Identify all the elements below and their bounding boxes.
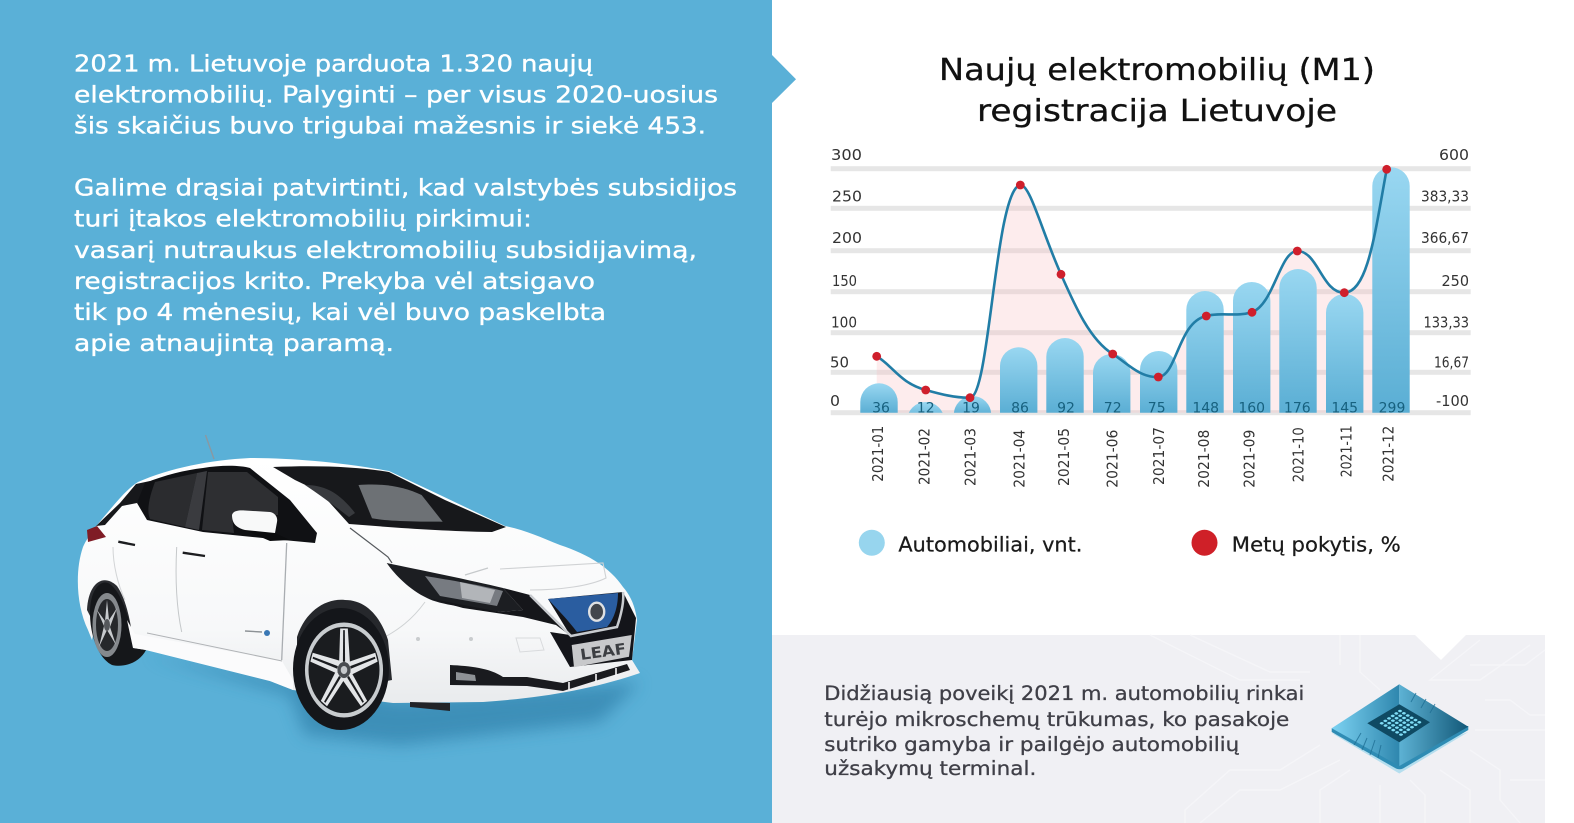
car shadow: [146, 655, 640, 745]
text block: subsidies effect: registracijos krito. Prekyba vėl atsigavo: [74, 269, 595, 295]
left axis labels: 300: [831, 146, 862, 164]
right axis labels: 250: [1442, 272, 1469, 290]
black strip to grille: [427, 588, 572, 637]
bars: cars per month: [860, 167, 1410, 421]
right axis labels: 16,67: [1434, 354, 1469, 372]
right axis labels: 383,33: [1421, 188, 1469, 206]
month axis labels: [869, 425, 1398, 488]
text block: chip shortage note: turėjo mikroschemų trūkumas, ko pasakoje: [824, 708, 1289, 731]
month axis labels: 2021-03: [962, 428, 980, 486]
month axis labels: 2021-01: [869, 426, 887, 482]
Nissan badge: [589, 603, 604, 621]
under-bumper: [410, 702, 450, 711]
front side window: [202, 472, 278, 533]
bar value labels: 160: [1238, 400, 1265, 416]
bar value labels: 176: [1284, 400, 1311, 416]
front seat: [305, 485, 355, 517]
legend: [859, 530, 1401, 557]
heading: chart title: registracija Lietuvoje: [977, 94, 1337, 129]
legend item: yearly change: [1192, 530, 1401, 557]
rear wheel: [87, 580, 146, 666]
month axis labels: 2021-08: [1195, 430, 1213, 488]
right axis labels: 133,33: [1424, 314, 1469, 332]
legend item: cars: Automobiliai, vnt.: [898, 533, 1082, 557]
arrow pointing at chart: [772, 55, 796, 103]
bar value labels: 148: [1192, 400, 1219, 416]
line data points: [872, 165, 1391, 402]
number plate LEAF: [572, 635, 632, 667]
text block: chip shortage note: užsakymų terminal.: [824, 757, 1036, 780]
door seams and handles: [113, 528, 606, 661]
bar value labels: 12: [917, 400, 935, 416]
number plate LEAF: LEAF: [579, 640, 627, 664]
rear black trim and tail light: [87, 481, 150, 542]
month axis labels: 2021-05: [1055, 428, 1073, 486]
antenna: [206, 435, 214, 459]
door pillar: [185, 471, 207, 530]
white side skirt: [127, 620, 293, 690]
text block: registrations summary: šis skaičius buvo trigubai mažesnis ir siekė 453.: [74, 114, 706, 140]
month axis labels: 2021-04: [1010, 430, 1028, 488]
EV badge: [245, 630, 270, 636]
month axis labels: 2021-02: [915, 428, 933, 485]
right axis labels: -100: [1436, 392, 1469, 410]
bar value labels: [872, 400, 1405, 416]
right axis labels: [1421, 146, 1469, 410]
text block: subsidies effect: vasarį nutraukus elektromobilių subsidijavimą,: [74, 238, 697, 264]
icon: microchip: [1332, 684, 1468, 774]
left axis labels: 0: [830, 392, 840, 410]
bar value labels: 72: [1104, 400, 1122, 416]
left axis labels: [830, 146, 862, 410]
bar value labels: 299: [1379, 400, 1405, 416]
blue grille: [548, 593, 618, 632]
month axis labels: 2021-07: [1150, 427, 1168, 485]
bar value labels: 19: [962, 400, 980, 416]
right axis labels: 600: [1439, 146, 1469, 164]
left axis labels: 250: [832, 188, 862, 206]
text block: registrations summary: [74, 52, 718, 140]
month axis labels: 2021-09: [1240, 430, 1258, 488]
right axis labels: 366,67: [1421, 229, 1469, 247]
side window surround: [137, 466, 317, 543]
car interior through windshield: [358, 484, 443, 522]
parking sensors: [416, 637, 473, 641]
side mirror: [232, 510, 290, 541]
bar value labels: 145: [1331, 400, 1358, 416]
text block: registrations summary: 2021 m. Lietuvoje parduota 1.320 naujų: [74, 52, 593, 78]
bar value labels: 86: [1011, 400, 1029, 416]
black front frame: [548, 592, 636, 667]
chrome V-motion: [530, 592, 623, 636]
text block: subsidies effect: turi įtakos elektromobilių pirkimui:: [74, 207, 532, 233]
left axis labels: 200: [832, 229, 862, 247]
left axis labels: 50: [830, 354, 849, 372]
bar value labels: 75: [1148, 400, 1166, 416]
text block: subsidies effect: apie atnaujintą paramą.: [74, 331, 394, 357]
month axis labels: 2021-11: [1338, 425, 1356, 477]
windshield: [273, 466, 506, 532]
month axis labels: 2021-12: [1380, 426, 1398, 482]
left axis labels: 150: [832, 272, 857, 290]
text block: subsidies effect: Galime drąsiai patvirtinti, kad valstybės subsidijos: [74, 176, 737, 202]
bar value labels: 92: [1057, 400, 1075, 416]
area under the change line: [877, 169, 1387, 413]
bar value labels: 36: [872, 400, 890, 416]
panel: blue text and car panel: [0, 0, 796, 823]
heading: chart title: Naujų elektromobilių (M1): [939, 53, 1375, 88]
text block: subsidies effect: [74, 176, 737, 357]
rear side window: [148, 473, 197, 527]
text block: subsidies effect: tik po 4 mėnesių, kai vėl buvo paskelbta: [74, 300, 606, 326]
month axis labels: 2021-10: [1290, 427, 1308, 482]
lower air vents and fog lamp: [450, 664, 630, 691]
illustration: white Nissan Leaf car: [78, 435, 640, 745]
front wheel: [293, 600, 392, 730]
text block: registrations summary: elektromobilių. Palyginti – per visus 2020-uosius: [74, 82, 718, 108]
text block: chip shortage note: sutriko gamyba ir pailgėjo automobilių: [824, 733, 1239, 756]
car body: [78, 458, 640, 703]
panel: grey note panel: [772, 635, 1545, 823]
month axis labels: 2021-06: [1103, 430, 1121, 488]
chart: monthly registrations and yearly change: [830, 146, 1471, 488]
left axis labels: 100: [831, 314, 857, 332]
text block: chip shortage note: Didžiausią poveikį 2021 m. automobilių rinkai: [824, 682, 1304, 705]
legend item: yearly change: Metų pokytis, %: [1232, 533, 1401, 557]
line: yearly change: [877, 169, 1387, 398]
headlight: [387, 563, 523, 612]
heading: chart title: [939, 53, 1375, 129]
text block: chip shortage note: [824, 682, 1304, 780]
